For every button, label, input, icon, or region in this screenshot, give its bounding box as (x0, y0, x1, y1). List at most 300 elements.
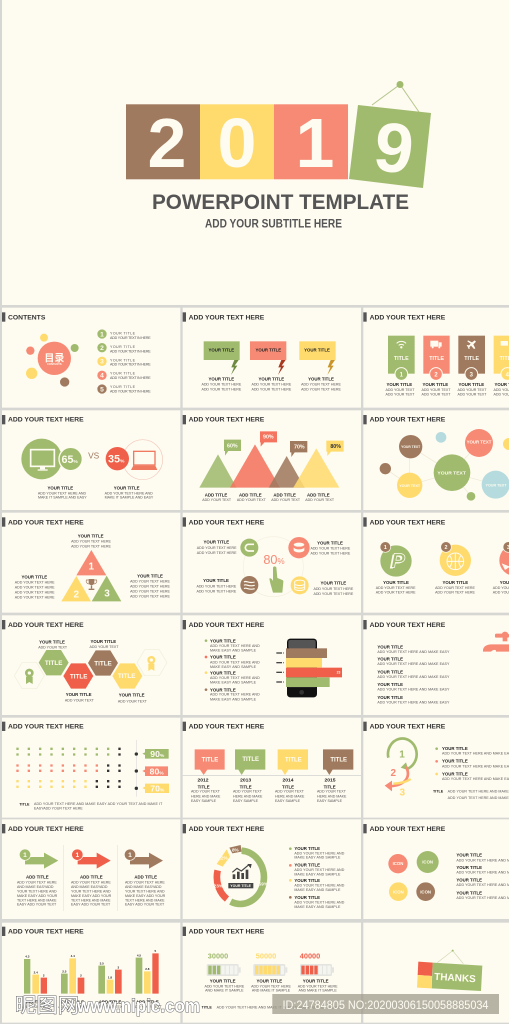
panel: bar chart: ADD YOUR TEXT HERE (8, 928, 84, 935)
ribbon captions: YOUR TITLE (458, 382, 484, 387)
contents list: ADD YOUR TEXT IN HERE (110, 389, 151, 393)
hexagon captions: ADD YOUR TEXT (65, 699, 95, 703)
percent tags: 80% (150, 766, 164, 776)
arrow captions: ADD TITLE (134, 874, 157, 879)
triangles: 2 (74, 589, 80, 600)
ribbon captions: YOUR TITLE (422, 382, 448, 387)
panel: bubble network (363, 410, 509, 510)
triangles: 3 (104, 589, 110, 600)
bars: 5 (154, 949, 156, 953)
panel: ribbon cards (363, 308, 509, 408)
contents list: YOUR TITLE (110, 372, 136, 376)
tap list text: ADD YOUR TEXT HERE AND MAKE EASY (377, 650, 450, 654)
panel: versus comparison: ADD YOUR TEXT HERE (8, 417, 84, 424)
cycle list: TITLE (433, 790, 444, 794)
donut label (228, 883, 253, 888)
icon: water tap (483, 632, 509, 652)
timeline captions: HERE AND MAKE (191, 794, 221, 798)
mountain captions: ADD YOUR TEXT (202, 498, 232, 502)
arrow captions: AND MAKE EASYADD (125, 885, 162, 889)
yellow box (299, 341, 341, 392)
salmon box: YOUR TITLE (258, 376, 284, 381)
ribbon captions: YOUR TITLE (386, 382, 412, 387)
versus captions: MAKE IT SAMPLE AND EASY (105, 496, 154, 500)
bubbles: YOUR TEXT (437, 470, 466, 476)
triangle captions: ADD YOUR TEXT HERE (130, 580, 170, 584)
timeline captions: ADD YOUR TEXT (191, 790, 221, 794)
arrow 3 (124, 849, 163, 869)
dot matrix note: EASYADD YOUR TEXT HERE (34, 806, 83, 810)
timeline captions: HERE AND MAKE (275, 794, 305, 798)
bar captions (21, 999, 163, 1009)
arrow captions: AND MAKE EASYADD (17, 885, 54, 889)
bubbles: YOUR TEXT (399, 484, 421, 488)
gauge red: AND MAKE IT SAMPLE (299, 989, 337, 993)
panel: arrow steps (2, 819, 180, 919)
panel: contents (2, 308, 180, 408)
hand captions: ADD YOUR TEXT HERE (313, 592, 354, 596)
panel: numbered icons (363, 513, 509, 613)
ribbon 2 truck (423, 336, 450, 380)
donut legend (289, 846, 345, 909)
contents list: 1 (100, 331, 104, 338)
triangles (61, 550, 121, 601)
laptop 35 percent (106, 440, 163, 480)
gauge yellow: AND MAKE IT SAMPLE (252, 989, 291, 993)
contents circle cluster (26, 334, 79, 387)
panel: donut chart: ADD YOUR TEXT HERE (189, 826, 265, 833)
arrow captions: YOUR TEXT HERE AND (125, 889, 165, 893)
triangles (199, 444, 339, 488)
hand captions: YOUR TITLE (320, 581, 346, 586)
yellow box: ADD YOUR TEXT HERE (301, 388, 341, 392)
hand captions: YOUR TITLE (317, 540, 343, 545)
icon: paypal (380, 542, 412, 577)
bar captions: ADD TITLE (61, 999, 84, 1004)
bars: 1.8 (108, 975, 112, 979)
ribbon captions: ADD YOUR TEXT (386, 388, 415, 392)
panel: hexagon process (2, 615, 180, 715)
cycle diagram: 3 (400, 787, 406, 798)
mountain captions (202, 492, 335, 502)
icon list: YOUR TITLE (456, 878, 482, 883)
bar captions: ADD TITLE (99, 999, 121, 1004)
arrow captions: AND MAKE EASYADD (71, 885, 108, 889)
mountain captions: ADD TITLE (205, 492, 227, 497)
cycle diagram: 2 (391, 768, 397, 779)
hand captions: YOUR TITLE (203, 540, 229, 545)
donut legend: YOUR TITLE (294, 846, 320, 851)
contents circle cluster: 目录 (44, 351, 64, 364)
panel: mountain chart: ADD YOUR TEXT HERE (189, 417, 265, 424)
cycle list: YOUR TITLE (442, 746, 468, 751)
contents circle cluster: CONTENTS (47, 362, 62, 366)
panel: battery gauges: ADD YOUR TEXT HERE (189, 928, 265, 935)
contents list: ADD YOUR TEXT IN HERE (110, 376, 151, 380)
tap list text: YOUR TITLE (377, 656, 403, 661)
timeline captions: HERE AND MAKE (317, 794, 347, 798)
dot matrix note: ADD YOUR TEXT HERE AND MAKE EASY ADD YOUR TEXT AND MAKE IT (34, 802, 163, 806)
bars: 2 (80, 973, 82, 977)
cycle diagram: 1 (399, 749, 405, 760)
ribbon 2 truck: 2 (434, 372, 438, 378)
bars: 2.4 (34, 970, 38, 974)
ribbon captions: ADD YOUR TEXT (422, 388, 451, 392)
icon: growth chart (232, 864, 252, 879)
four icon circles: ICON (420, 889, 431, 894)
arrow captions: YOUR TEXT HERE AND (71, 889, 111, 893)
panel: cycle arrows: ADD YOUR TEXT HERE (370, 724, 446, 731)
bullet list: ADD YOUR TEXT HERE AND (210, 644, 260, 648)
bullet list: YOUR TITLE (210, 670, 236, 675)
arrow captions: MAKE EASY ADD YOUR (125, 894, 166, 898)
icon list (456, 853, 509, 900)
panel: tap list (363, 615, 509, 715)
timeline bubbles: TITLE (202, 758, 218, 764)
hanging sign: digit 9 (349, 81, 431, 189)
bullet list: ADD YOUR TEXT HERE AND (210, 660, 260, 664)
triangle captions: ADD YOUR TEXT HERE (15, 595, 55, 599)
triangle captions: YOUR TITLE (137, 574, 163, 579)
numbered captions: ADD YOUR TEXT HERE (435, 586, 475, 590)
icon list: YOUR TITLE (456, 865, 482, 870)
contents list: YOUR TITLE (110, 345, 136, 349)
panel: arrow steps: ADD YOUR TEXT HERE (8, 826, 84, 833)
filled hexagons: TITLE (45, 660, 62, 667)
arrow 3: 1 (128, 852, 132, 859)
timeline captions: EASY SAMPLE (317, 799, 343, 803)
ribbon 3 plane (458, 336, 485, 380)
triangle captions: YOUR TITLE (21, 574, 47, 579)
block: digit 2 (126, 104, 200, 182)
hand captions: ADD YOUR TEXT HERE (196, 589, 237, 593)
mountain captions: ADD TITLE (273, 492, 296, 497)
yellow box: YOUR TITLE (308, 376, 334, 381)
bullet list: YOUR TITLE (210, 655, 236, 660)
cycle list: YOUR TITLE (442, 771, 468, 776)
watermark: logo: 昵图网 (15, 989, 79, 1018)
timeline captions: 2015 (324, 777, 336, 783)
timeline captions: 2012 (197, 777, 209, 783)
timeline captions: TITLE (324, 784, 336, 789)
contents list: YOUR TITLE (110, 332, 136, 336)
icon: paypal: 1 (384, 545, 387, 551)
gauge yellow (251, 952, 291, 993)
bullet list: MAKE EASY AND SAMPLE (210, 680, 257, 684)
four icon circles: ICON (393, 861, 403, 866)
contents list: YOUR TITLE (110, 358, 136, 362)
icon: paypal: P (389, 550, 403, 573)
numbered captions: YOUR TITLE (383, 580, 409, 585)
filled hexagons: TITLE (94, 661, 112, 668)
mountain captions: ADD TITLE (239, 492, 262, 497)
block: digit 0: 0 (218, 104, 256, 182)
hexagon captions: ADD YOUR TEXT (118, 699, 148, 703)
strip: row 7 (2, 923, 509, 1023)
numbered captions: ADD YOUR TEXT HERE (376, 590, 416, 594)
donut legend: YOUR TITLE (294, 878, 320, 883)
panel: speech boxes: ADD YOUR TEXT HERE (189, 314, 265, 321)
hand captions: ADD YOUR TEXT HERE (313, 587, 354, 591)
laptop 35 percent: 35% (108, 454, 125, 466)
bullet list: ADD YOUR TEXT HERE AND (210, 676, 260, 680)
bar captions: ADD YOUR TEXT (133, 1005, 163, 1009)
cycle list: YOUR TITLE (442, 759, 468, 764)
percent bubbles (224, 431, 344, 457)
tap list text: ADD YOUR TEXT HERE AND MAKE EASY (377, 662, 450, 666)
gauge red: YOUR TITLE (303, 979, 329, 984)
filled hexagons (39, 650, 142, 689)
panel: speech boxes (183, 308, 361, 408)
contents list: YOUR TITLE (110, 385, 136, 389)
arrow captions: ADD TITLE (26, 874, 49, 879)
filled hexagons: TITLE (118, 673, 135, 680)
bars: 4.5 (137, 953, 141, 957)
green box: ADD YOUR TEXT HERE (201, 388, 242, 392)
donut legend: YOUR TITLE (294, 895, 320, 900)
donut: 12% (218, 855, 229, 860)
bar captions: ADD YOUR TEXT (96, 1005, 125, 1009)
tap list text (377, 644, 450, 705)
triangle captions: ADD YOUR TEXT HERE (71, 544, 111, 548)
donut: 59% (259, 881, 269, 886)
bars (24, 949, 159, 994)
strip: rows 3 and 4 (2, 513, 509, 715)
tap list text: YOUR TITLE (377, 695, 403, 700)
arrow captions: TEXT HERE AND MAKE (125, 898, 165, 902)
hand captions: ADD YOUR TEXT HERE (310, 546, 351, 550)
triangle captions: ADD YOUR TEXT HERE (130, 594, 170, 598)
arrow captions: EASY ADD YOUR TEXT (71, 903, 111, 907)
panel: dot matrix: ADD YOUR TEXT HERE (8, 724, 84, 731)
bubbles (380, 429, 509, 501)
contents list: ADD YOUR TEXT IN HERE (110, 363, 151, 367)
ribbon 4 cart: 4 (506, 372, 509, 378)
hanging thanks sign: THANKS (434, 972, 476, 985)
donut legend: MAKE EASY AND SAMPLE (294, 856, 341, 860)
panel: phone bar chart: ADD YOUR TEXT HERE (189, 622, 265, 629)
cycle list (433, 746, 509, 800)
triangle captions: ADD YOUR TEXT HERE (15, 580, 55, 584)
salmon dots (16, 764, 121, 772)
donut label: YOUR TITLE (230, 884, 252, 888)
timeline captions (191, 777, 347, 803)
percent tags: 70% (150, 783, 165, 793)
bubbles: YOUR TEXT (467, 440, 492, 445)
panel: 80 percent hand (183, 513, 361, 613)
versus captions: YOUR TITLE (114, 485, 140, 490)
versus captions (38, 485, 154, 500)
panel: timeline: ADD YOUR TEXT HERE (189, 724, 265, 731)
timeline captions: EASY SAMPLE (233, 799, 259, 803)
arrow 2: 1 (75, 852, 79, 859)
percent bubbles: 70% (294, 445, 305, 451)
contents list: ADD YOUR TEXT IN HERE (110, 336, 151, 340)
triangle captions: ADD YOUR TEXT HERE (130, 585, 170, 589)
arrow captions: MAKE EASY ADD YOUR (17, 894, 58, 898)
salmon box: ADD YOUR TEXT HERE (251, 383, 292, 387)
block: digit 0 (200, 104, 274, 182)
arrow captions: MAKE EASY ADD YOUR (71, 894, 112, 898)
green box: YOUR TITLE (208, 348, 234, 353)
triangles: 1 (89, 561, 95, 572)
contents list (97, 329, 151, 394)
yellow dots (16, 780, 121, 788)
timeline captions: 2013 (240, 777, 251, 783)
salmon box: ADD YOUR TEXT HERE (251, 388, 292, 392)
panel: dot matrix (2, 718, 180, 818)
mountain captions: ADD YOUR TEXT (237, 498, 267, 502)
bars: 4.4 (71, 954, 75, 958)
ribbon captions: ADD YOUR TEXT (422, 393, 451, 397)
panel: icon circles (363, 819, 509, 919)
bar captions: ADD TITLE (24, 999, 47, 1004)
percent bubbles: 60% (227, 443, 238, 449)
timeline captions: ADD YOUR TEXT (275, 790, 305, 794)
bubbles: YOUR TEXT (401, 445, 420, 449)
gauge green: ADD YOUR TEXT HERE (204, 985, 245, 989)
mountain captions: ADD YOUR TEXT (305, 498, 335, 502)
percent bubbles: 90% (263, 435, 274, 441)
strip: rows 5 and 6 (2, 718, 509, 919)
icon list: YOUR TITLE (456, 853, 482, 858)
block: digit 1 (274, 104, 348, 182)
bars: 3.5 (100, 961, 104, 965)
triangle captions: YOUR TITLE (78, 533, 104, 538)
ribbon captions (386, 382, 509, 397)
bars: 2.5 (62, 969, 67, 973)
contents list: 4 (100, 373, 104, 380)
ribbon 4 cart (494, 336, 509, 380)
block: digit 2: 2 (148, 104, 186, 182)
hexagon captions: YOUR TITLE (39, 639, 65, 644)
panel: timeline (183, 718, 361, 818)
panel: mountain chart (183, 410, 361, 510)
panel: numbered icons: ADD YOUR TEXT HERE (370, 519, 446, 526)
arrow 1: 1 (23, 852, 27, 859)
arrow captions: TEXT HERE AND MAKE (71, 898, 111, 902)
contents list: 2 (100, 345, 104, 352)
gauge yellow: ADD YOUR TEXT HERE (251, 985, 291, 989)
timeline captions: TITLE (198, 784, 210, 789)
icon: basketball (440, 542, 471, 576)
VS label: VS (88, 451, 100, 461)
hexagon captions (38, 639, 148, 703)
arrow captions (17, 874, 166, 907)
percent bubbles: 80% (330, 444, 341, 450)
panel: battery gauges (183, 923, 361, 1023)
watermark: id band (272, 994, 499, 1014)
80 percent: 80% (263, 553, 285, 567)
arrow captions: EASY ADD YOUR TEXT (17, 903, 57, 907)
numbered captions (376, 580, 509, 594)
gauge green: YOUR TITLE (210, 979, 236, 984)
tap list text: YOUR TITLE (377, 669, 403, 674)
icon list: YOUR TITLE (456, 890, 482, 895)
donut (214, 845, 269, 904)
bars: 23 (337, 671, 341, 675)
donut legend: MAKE EASY AND SAMPLE (294, 905, 341, 909)
triangle captions: ADD YOUR TEXT HERE (71, 539, 111, 543)
arrow captions: ADD YOUR TEXT HERE (71, 881, 111, 885)
ribbon 3 plane: 3 (470, 372, 474, 378)
gauge red: ADD YOUR TEXT HERE (298, 985, 338, 989)
hand captions: YOUR TITLE (203, 578, 229, 583)
title: POWERPOINT TEMPLATE (152, 190, 409, 214)
panel: triangle diagram: ADD YOUR TEXT HERE (8, 519, 84, 526)
icon: pointing hand (269, 566, 283, 593)
arrow captions: EASY ADD YOUR TEXT (125, 903, 165, 907)
donut legend: ADD YOUR TEXT HERE AND (294, 851, 345, 855)
timeline captions: EASY SAMPLE (191, 799, 217, 803)
gauge note: TITLE (202, 1005, 212, 1009)
arrow 1 (19, 849, 58, 869)
cycle diagram (385, 739, 417, 798)
dot matrix note: TITLE (19, 803, 30, 807)
green dots (16, 748, 121, 756)
hand captions: ADD YOUR TEXT HERE (197, 546, 237, 550)
timeline captions: TITLE (282, 784, 294, 789)
versus captions: ADD YOUR TEXT HERE AND (38, 491, 86, 495)
strip: rows 1 and 2 (2, 308, 509, 510)
timeline bubbles: TITLE (330, 758, 347, 764)
mountain captions: ADD TITLE (307, 492, 330, 497)
versus captions: ADD YOUR TEXT HERE AND (105, 491, 153, 495)
hand captions: ADD YOUR TEXT HERE (196, 584, 237, 588)
bullet list: MAKE EASY AND SAMPLE (210, 665, 257, 669)
watermark: logo: www.nipic.com (76, 996, 200, 1016)
bar captions: ADD TITLE (136, 999, 159, 1004)
desktop 65 percent: 65% (62, 454, 78, 466)
panel: ribbon cards: ADD YOUR TEXT HERE (370, 314, 446, 321)
gauge green: AND MAKE IT SAMPLE (205, 989, 244, 993)
gauge green: 30000 (208, 952, 228, 961)
hexagon captions: YOUR TITLE (119, 693, 145, 698)
gauge red (298, 952, 338, 993)
watermark: id band: ID:24784805 NO:20200306150058885034 (282, 1000, 489, 1012)
four icon circles: ICON (393, 889, 404, 894)
four icon circles: ICON (422, 860, 433, 865)
numbered captions: YOUR TITLE (442, 580, 468, 585)
timeline captions: ADD YOUR TEXT (233, 790, 263, 794)
timeline captions: EASY SAMPLE (275, 799, 301, 803)
bullet list: YOUR TITLE (210, 687, 236, 692)
donut legend: MAKE EASY AND SAMPLE (294, 888, 341, 892)
panel: icon circles: ADD YOUR TEXT HERE (370, 826, 446, 833)
triangle captions: ADD YOUR TEXT HERE (15, 590, 55, 594)
hand captions: ADD YOUR TEXT HERE (310, 551, 351, 555)
ribbon 1 wifi: TITLE (394, 356, 409, 362)
hand captions (196, 540, 354, 596)
bar captions: ADD YOUR TEXT (21, 1005, 51, 1009)
contents list: 3 (100, 359, 104, 366)
block: digit 1: 1 (296, 104, 334, 182)
panel: triangle diagram (2, 513, 180, 613)
gauge note: ADD YOUR TEXT HERE AND MAKE IT SAMPLE ADD YOUR TEXT HERE (217, 1005, 340, 1009)
timeline bubbles (195, 749, 353, 775)
donut legend: ADD YOUR TEXT HERE AND (294, 883, 345, 887)
bullet list (205, 638, 260, 701)
triangle captions (15, 533, 170, 599)
donut legend: ADD YOUR TEXT HERE AND (294, 868, 345, 872)
donut legend: YOUR TITLE (294, 863, 320, 868)
panel: phone bar chart (183, 615, 361, 715)
timeline bubbles: TITLE (242, 757, 259, 763)
bars: 2 (43, 973, 45, 977)
yellow box: YOUR TITLE (304, 348, 330, 353)
ribbon captions: ADD YOUR TEXT (458, 388, 487, 392)
panel: cover slide (2, 0, 509, 305)
